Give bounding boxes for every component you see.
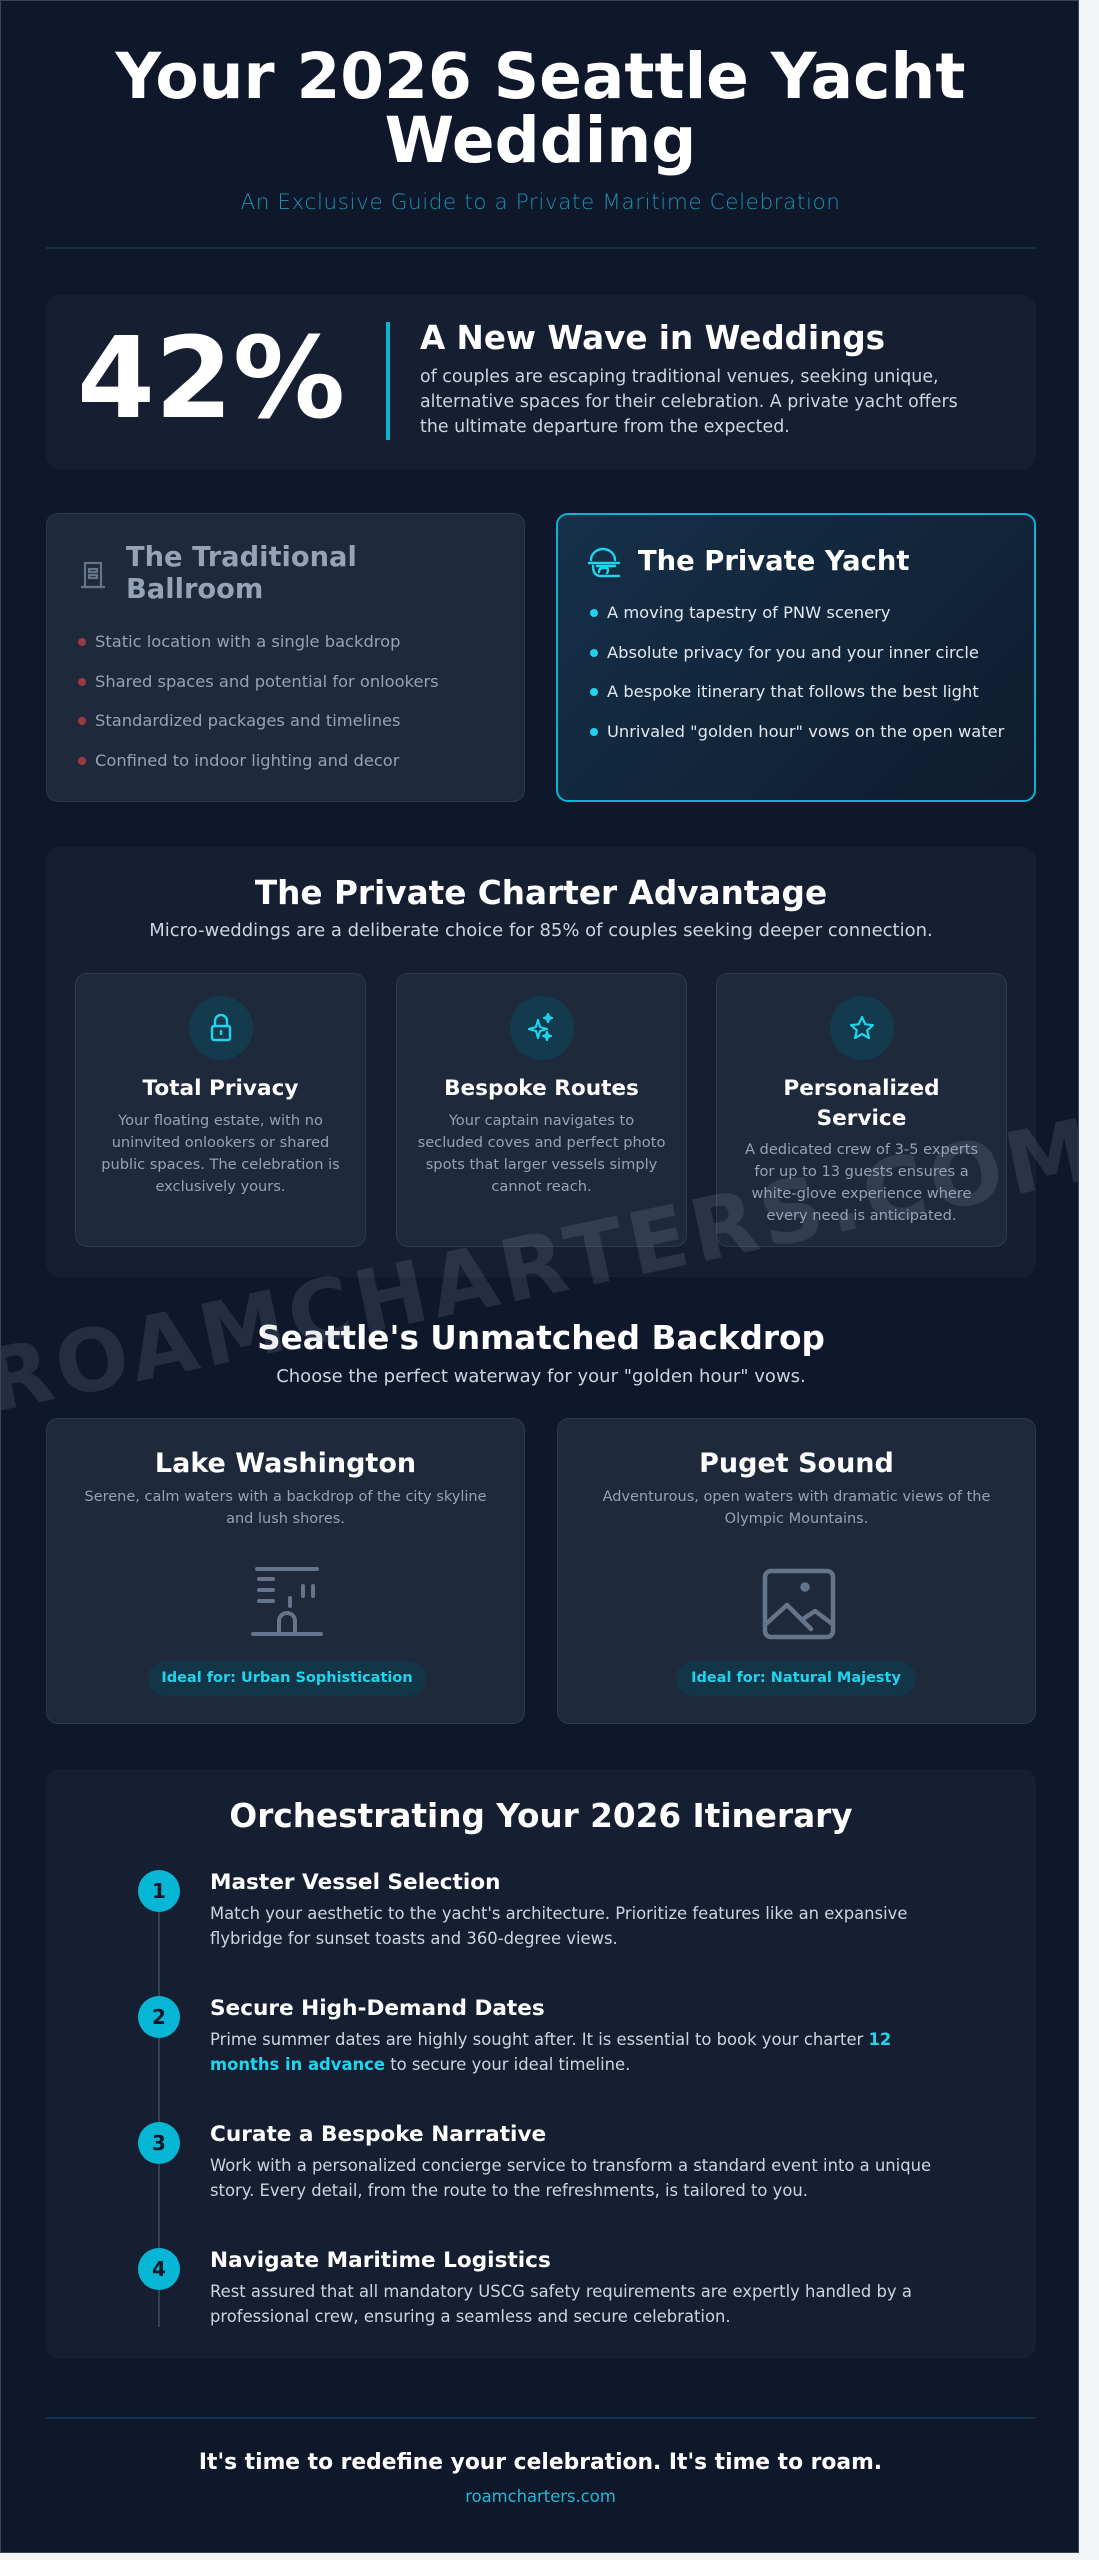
feature: personalized service: for up to 13 guests ensures a — [754, 1163, 969, 1180]
feature: personalized service: Service — [817, 1106, 906, 1131]
list: Shared spaces and potential for onlookers — [95, 672, 439, 691]
panel: lake washington: Serene, calm waters with a backdrop of the city skyline and lush shores. — [84, 1489, 487, 1527]
feature: bespoke routes — [396, 973, 687, 1247]
title: Wedding — [385, 104, 696, 177]
icon: sparkles — [510, 996, 574, 1060]
list: Unrivaled "golden hour" vows on the open water — [607, 722, 1004, 741]
panel: itinerary — [46, 1769, 1036, 2359]
pill: Ideal for: Urban Sophistication — [161, 1670, 413, 1686]
feature: bespoke routes: spots that larger vessels simply — [426, 1156, 657, 1173]
feature: total privacy: exclusively yours. — [155, 1178, 286, 1195]
feature: personalized service: A dedicated crew of 3-5 experts — [745, 1141, 978, 1158]
pill: Ideal for: Natural Majesty — [691, 1670, 901, 1686]
stat card — [46, 295, 1036, 469]
pill — [676, 1661, 916, 1696]
stat text: of couples are escaping traditional venues, seeking unique, alternative spaces for their celebration. A private yacht offers the ultimate departure from the expected. — [420, 367, 958, 437]
accent line — [386, 322, 390, 440]
panel: itinerary: Navigate Maritime Logistics — [210, 2248, 551, 2273]
feature: personalized service: Personalized — [783, 1076, 940, 1101]
heading: Orchestrating Your 2026 Itinerary — [229, 1797, 853, 1835]
list: Confined to indoor lighting and decor — [95, 751, 399, 770]
panel: puget sound — [557, 1418, 1036, 1724]
icon: yacht — [588, 548, 620, 578]
panel: itinerary: 3 — [152, 2131, 166, 2155]
title: Your 2026 Seattle Yacht — [115, 40, 966, 113]
footer tagline: It's time to redefine your celebration. It's time to roam. — [199, 2450, 882, 2475]
panel: itinerary: 2 — [152, 2005, 166, 2029]
icon: building — [81, 562, 105, 588]
icon: star — [830, 996, 894, 1060]
step 2 — [138, 1996, 891, 2074]
panel: lake washington — [46, 1418, 525, 1724]
step 4 — [138, 2248, 912, 2326]
panel: itinerary: Curate a Bespoke Narrative — [210, 2122, 546, 2147]
feature: bespoke routes: secluded coves and perfect photo — [418, 1134, 665, 1151]
feature: bespoke routes: cannot reach. — [491, 1178, 592, 1195]
subtitle: An Exclusive Guide to a Private Maritime Celebration — [240, 190, 841, 215]
panel: itinerary: Secure High-Demand Dates — [210, 1996, 545, 2021]
list: A bespoke itinerary that follows the best light — [607, 682, 979, 701]
panel: lake washington: Lake Washington — [155, 1448, 416, 1479]
subheading: Micro-weddings are a deliberate choice for 85% of couples seeking deeper connection. — [149, 920, 933, 941]
subheading: backdrop: Choose the perfect waterway for your "golden hour" vows. — [276, 1366, 806, 1387]
feature: total privacy: uninvited onlookers or shared — [112, 1134, 329, 1151]
feature: bespoke routes: Your captain navigates to — [449, 1112, 634, 1129]
feature: total privacy: Total Privacy — [143, 1076, 298, 1101]
heading: Ballroom — [126, 574, 263, 605]
stat heading: A New Wave in Weddings — [420, 319, 885, 357]
step 3 — [138, 2122, 931, 2200]
feature: bespoke routes: Bespoke Routes — [444, 1076, 639, 1101]
panel: puget sound: Puget Sound — [699, 1448, 894, 1479]
list: Standardized packages and timelines — [95, 711, 401, 730]
panel: traditional ballroom — [46, 513, 525, 802]
panel: itinerary: Rest assured that all mandatory USCG safety requirements are expertly handled by a professional crew, ensuring a seamless and secure celebration. — [210, 2282, 912, 2326]
panel: puget sound: Adventurous, open waters with dramatic views of the Olympic Mountains. — [603, 1489, 990, 1527]
icon: landscape image — [762, 1568, 836, 1640]
panel: itinerary: 1 — [152, 1879, 166, 1903]
panel: itinerary: Match your aesthetic to the yacht's architecture. Prioritize features like an expansive flybridge for sunset toasts and 360-degree views. — [210, 1904, 907, 1948]
list — [78, 632, 439, 770]
feature: total privacy — [75, 973, 366, 1247]
list: A moving tapestry of PNW scenery — [607, 603, 890, 622]
heading: The Private Charter Advantage — [255, 874, 827, 912]
panel: itinerary: Work with a personalized concierge service to transform a standard event into a unique story. Every detail, from the route to the refreshments, is tailored to you. — [210, 2156, 931, 2200]
panel: charter advantage — [46, 847, 1036, 1277]
heading — [126, 542, 357, 605]
panel: itinerary: Master Vessel Selection — [210, 1870, 500, 1895]
stat number: 42% — [77, 314, 345, 444]
list: Absolute privacy for you and your inner circle — [607, 643, 979, 662]
timeline line — [158, 1891, 160, 2327]
step 1 — [138, 1870, 907, 1948]
feature: personalized service — [716, 973, 1007, 1247]
heading: The Private Yacht — [638, 546, 909, 577]
feature: personalized service: white-glove experience where — [751, 1185, 972, 1202]
feature: personalized service: every need is anticipated. — [766, 1207, 957, 1224]
list — [590, 603, 1004, 741]
heading: backdrop: Seattle's Unmatched Backdrop — [257, 1319, 825, 1357]
icon: lock — [188, 996, 252, 1060]
footer url: roamcharters.com — [465, 2487, 616, 2506]
panel: itinerary: 4 — [152, 2257, 166, 2281]
feature: total privacy: public spaces. The celebration is — [101, 1156, 340, 1173]
icon: city skyline — [251, 1567, 323, 1636]
title — [114, 40, 966, 177]
heading: The Traditional — [126, 542, 357, 573]
panel: private yacht — [556, 513, 1036, 802]
pill — [148, 1661, 426, 1696]
feature: total privacy: Your floating estate, with no — [118, 1112, 323, 1129]
list: Static location with a single backdrop — [95, 632, 400, 651]
panel: itinerary: Prime summer dates are highly sought after. It is essential to book your charter 12 months in advance to secure your ideal timeline. — [210, 2030, 891, 2074]
